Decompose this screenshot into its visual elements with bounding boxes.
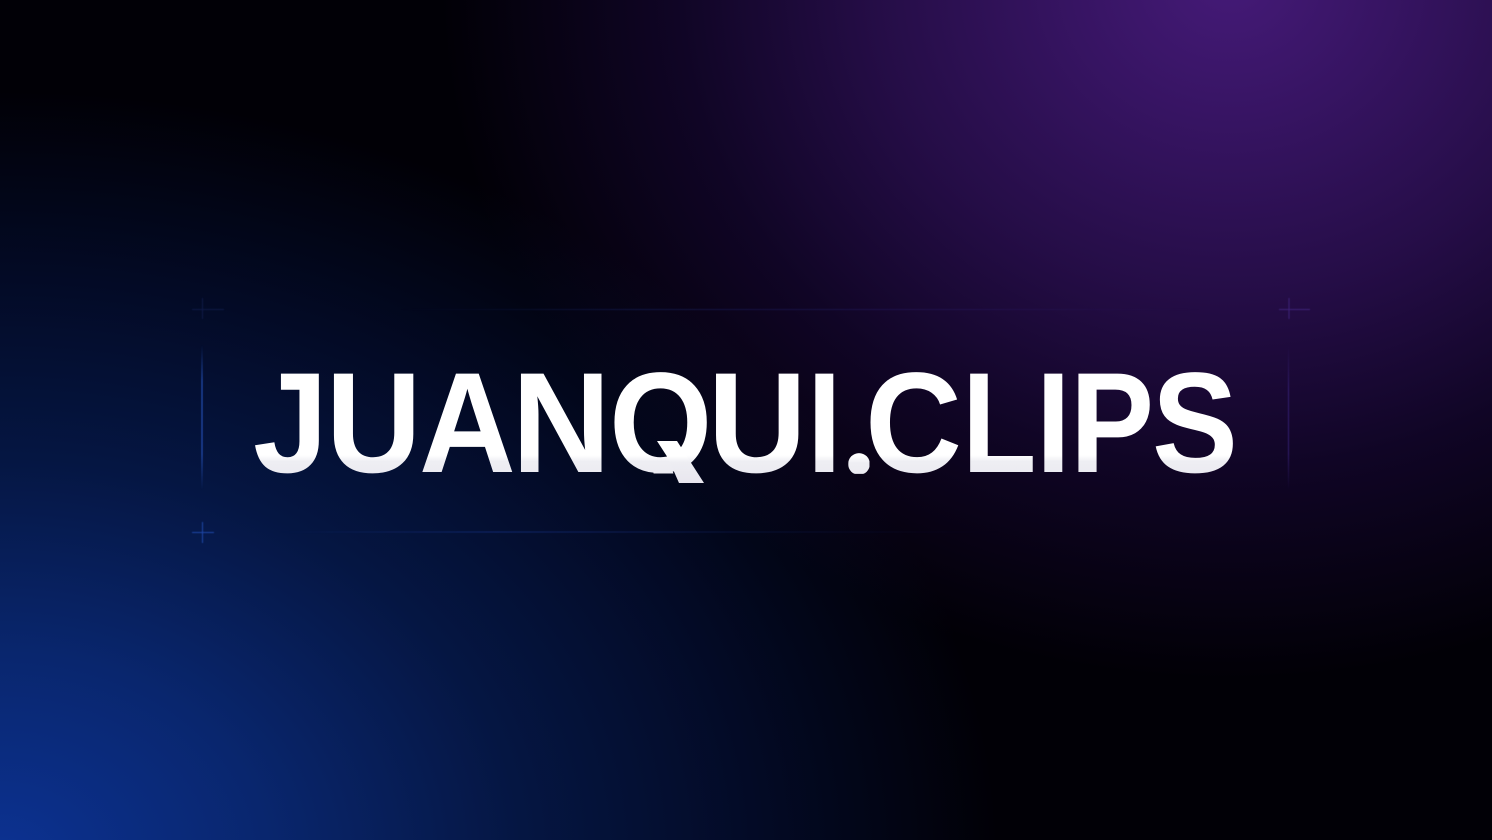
title: S [1152,344,1238,503]
title: U [326,344,421,503]
title: Q [608,344,712,503]
title: U [708,344,807,503]
title: N [512,344,611,503]
title: . [838,338,879,506]
title: I [1036,344,1070,503]
title: L [962,344,1036,503]
title [255,372,1233,483]
title: I [807,344,841,503]
title: P [1070,344,1154,503]
title: J [253,344,328,503]
title: C [864,344,961,503]
title: A [418,344,515,503]
